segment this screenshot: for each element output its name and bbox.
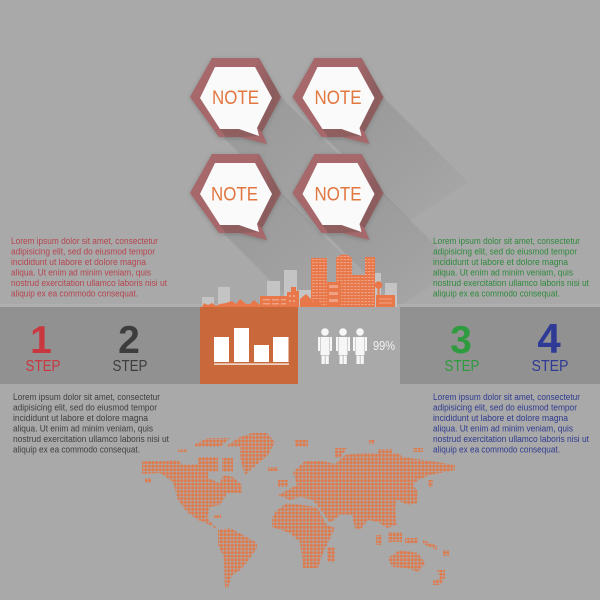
eurasia xyxy=(278,453,455,530)
text block: dark: adipisicing elit, sed do eiusmod tempor xyxy=(13,402,157,412)
text block: red: incididunt ut labore et dolore magna xyxy=(11,257,146,267)
step 4: STEP xyxy=(532,358,568,375)
greenland xyxy=(225,433,275,475)
note 2: NOTE xyxy=(314,87,362,109)
step 3: STEP xyxy=(444,358,480,375)
africa xyxy=(272,503,335,568)
text block: green: aliquip ex ea commodo consequat. xyxy=(433,288,560,298)
text block: blue xyxy=(433,392,590,454)
text block: green: aliqua. Ut enim ad minim veniam, quis xyxy=(433,268,574,278)
text block: green: adipisicing elit, sed do eiusmod tempor xyxy=(433,246,577,256)
arctic islands xyxy=(295,440,308,447)
note 1 xyxy=(190,58,281,145)
step 2: 2 xyxy=(118,319,140,362)
text block: red xyxy=(11,236,168,298)
text block: red: nostrud exercitation ullamco laboris nisi ut xyxy=(11,278,168,288)
step 1: STEP xyxy=(26,358,60,375)
uk xyxy=(278,480,288,487)
text block: green: Lorem ipsum dolor sit amet, consectetur xyxy=(433,236,580,246)
step 1: 1 xyxy=(30,319,52,362)
indonesia xyxy=(376,535,382,545)
text block: red: Lorem ipsum dolor sit amet, consectetur xyxy=(11,236,158,246)
text block: blue: aliquip ex ea commodo consequat. xyxy=(433,444,560,454)
note 1: NOTE xyxy=(212,87,259,109)
text block: blue: aliqua. Ut enim ad minim veniam, quis xyxy=(433,424,574,434)
text block: red: adipisicing elit, sed do eiusmod tempor xyxy=(11,246,155,256)
iceland xyxy=(268,467,278,471)
panel: orange bar chart xyxy=(200,307,298,384)
text block: dark: incididunt ut labore et dolore magna xyxy=(13,413,148,423)
new zealand xyxy=(433,570,445,585)
long shadows xyxy=(222,97,468,307)
text block: blue: Lorem ipsum dolor sit amet, consectetur xyxy=(433,392,580,402)
text block: dark: Lorem ipsum dolor sit amet, consectetur xyxy=(13,392,160,402)
step 2: STEP xyxy=(112,358,148,375)
text block: red: aliquip ex ea commodo consequat. xyxy=(11,288,138,298)
step band xyxy=(0,304,600,384)
north america xyxy=(142,460,242,530)
step 1 xyxy=(26,319,60,375)
madagascar xyxy=(327,547,335,562)
japan xyxy=(428,480,433,487)
label: 99 percent: 99% xyxy=(373,339,395,353)
text block: dark: nostrud exercitation ullamco laboris nisi ut xyxy=(13,434,170,444)
step 3 xyxy=(444,319,480,375)
city skyline xyxy=(202,254,397,307)
text block: blue: nostrud exercitation ullamco laboris nisi ut xyxy=(433,434,590,444)
text block: green: nostrud exercitation ullamco laboris nisi ut xyxy=(433,278,590,288)
note 3: NOTE xyxy=(211,184,258,206)
text block: dark: aliqua. Ut enim ad minim veniam, quis xyxy=(13,424,154,434)
icon: three people xyxy=(318,328,367,364)
text block: dark: aliquip ex ea commodo consequat. xyxy=(13,444,140,454)
step 4 xyxy=(532,315,568,375)
text block: green: incididunt ut labore et dolore magna xyxy=(433,257,568,267)
step 2 xyxy=(112,319,148,375)
australia xyxy=(388,550,425,572)
text block: blue: adipisicing elit, sed do eiusmod tempor xyxy=(433,402,577,412)
text block: red: aliqua. Ut enim ad minim veniam, quis xyxy=(11,268,152,278)
world dot map xyxy=(142,433,455,588)
step 3: 3 xyxy=(450,319,472,362)
note 3 xyxy=(190,154,281,241)
south america xyxy=(218,528,257,588)
note 4 xyxy=(292,154,384,241)
text block: blue: incididunt ut labore et dolore magna xyxy=(433,413,568,423)
text block: green xyxy=(433,236,590,298)
step 4: 4 xyxy=(537,315,561,362)
note 2 xyxy=(292,58,384,145)
note 4: NOTE xyxy=(314,184,362,206)
text block: dark xyxy=(13,392,170,454)
